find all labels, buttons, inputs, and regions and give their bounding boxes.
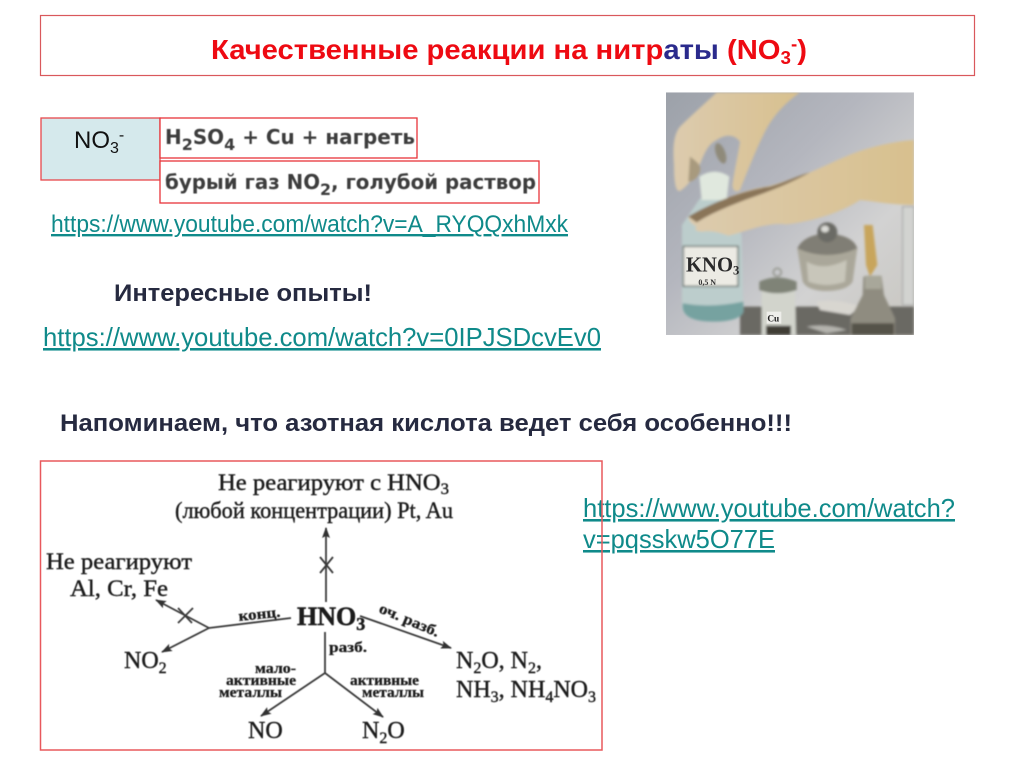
diagram labels: активные: [350, 673, 419, 689]
diagram labels: активные: [226, 673, 296, 689]
diagram labels: O: [387, 718, 405, 744]
diagram labels: конц.: [238, 605, 281, 625]
diagram labels: [46, 470, 596, 747]
icon: metal jar: [797, 248, 857, 291]
panel: observed result: , голубой раствор: [331, 170, 536, 194]
title: 3: [781, 48, 791, 68]
icon: table shadow: [740, 307, 914, 335]
text: bottle label: KNO: [686, 255, 733, 277]
icon: upper hand: [673, 92, 800, 191]
diagram labels: металлы: [362, 685, 424, 701]
diagram labels: HNO: [297, 602, 356, 631]
diagram labels: 2: [473, 660, 481, 677]
panel: observed result: [160, 161, 539, 203]
link: third video: v=pqsskw5O77E: [583, 526, 775, 554]
panel: nitrate ion cell: NO: [74, 127, 110, 154]
text: bottle label: Cu: [767, 315, 779, 325]
panel: reagents: SO: [193, 125, 224, 149]
diagram labels: Не реагируют: [46, 549, 192, 575]
panel: nitrate ion cell: 3: [110, 140, 119, 157]
diagram labels: 3: [356, 614, 365, 634]
diagram labels: разб.: [329, 640, 367, 656]
diagram labels: мало-: [255, 661, 296, 677]
panel: reagents: H: [165, 125, 182, 149]
diagram labels: NO: [553, 677, 588, 703]
diagram labels: металлы: [219, 685, 282, 701]
diagram labels: Не реагируют с HNO: [218, 470, 430, 496]
diagram labels: O, N: [481, 648, 528, 674]
title panel: [40, 16, 974, 76]
title: ): [797, 34, 807, 65]
heading: interesting experiments: Интересные опыты!: [114, 280, 372, 307]
panel: reagents: [160, 118, 417, 158]
diagram labels: 4: [545, 689, 553, 706]
diagram labels: Al, Cr, Fe: [70, 576, 168, 602]
text: bottle label: 3: [733, 263, 739, 277]
panel: nitrate ion cell: [41, 118, 160, 180]
diagram labels: (любой концентрации) Pt, Au: [175, 498, 453, 524]
diagram labels: 2: [379, 730, 387, 747]
diagram labels: 2: [528, 660, 536, 677]
diagram labels: 3: [588, 689, 596, 706]
title: -: [791, 34, 797, 54]
diagram labels: оч. разб.: [376, 601, 442, 641]
diagram labels: N: [362, 718, 379, 744]
text: bottle label: 0,5 N: [698, 278, 716, 287]
icon: glass at right: [903, 207, 914, 305]
diagram labels: NH: [456, 677, 491, 703]
diagram labels: N: [456, 648, 473, 674]
diagram labels: 3: [441, 481, 449, 498]
diagram labels: 3: [491, 689, 499, 706]
text: bottle label: [686, 255, 781, 325]
panel: nitrate ion cell: -: [119, 127, 124, 144]
arrows: [156, 528, 451, 717]
link: second video: https://www.youtube.com/watch?v=0IPJSDcvEv0: [43, 324, 601, 352]
diagram labels: ,: [536, 648, 542, 674]
link: third video: https://www.youtube.com/watch?: [583, 495, 955, 523]
panel: observed result: 2: [320, 180, 331, 199]
diagram labels: NO: [248, 718, 283, 744]
link: third video: [583, 495, 955, 554]
icon: Cu jar: [762, 288, 796, 335]
diagram labels: , NH: [499, 677, 545, 703]
photo: KNO3 bottle and hands: [666, 92, 914, 335]
icon: KNO3 bottle: [681, 198, 742, 306]
icon: dropper bottle: [864, 225, 877, 277]
diagram labels: 2: [159, 660, 167, 677]
diagram labels: NO: [124, 648, 159, 674]
panel: HNO3 reaction diagram: [40, 461, 602, 750]
title: Качественные реакции на нитр аты (NO: [211, 34, 778, 65]
panel: reagents: 2: [182, 135, 193, 154]
panel: reagents: 4: [224, 135, 235, 154]
link: first video: https://www.youtube.com/watch?v=A_RYQQxhMxk: [51, 212, 568, 238]
panel: observed result: бурый газ NO: [165, 170, 322, 194]
panel: reagents: + Cu + нагреть: [235, 125, 415, 149]
text: nitric acid reminder: Напоминаем, что азотная кислота ведет себя особенно!!!: [60, 410, 792, 437]
icon: lower hand: [688, 140, 914, 236]
